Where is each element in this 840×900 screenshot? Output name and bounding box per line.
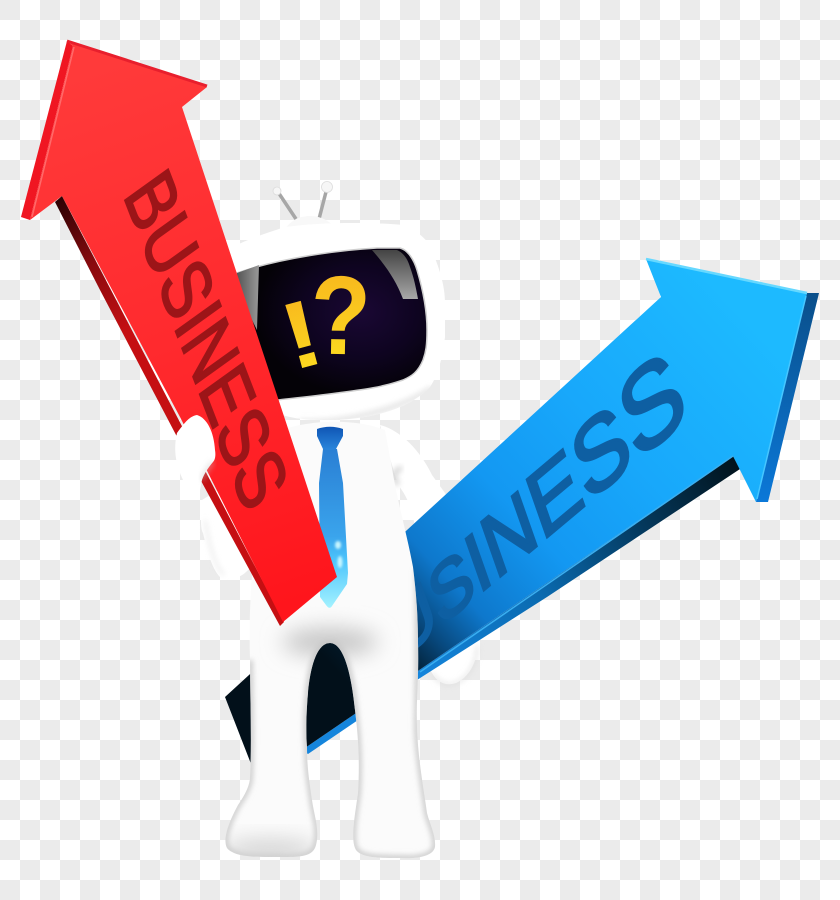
tie blade — [319, 449, 348, 608]
antenna cap — [283, 216, 338, 232]
blue arrow face — [225, 259, 807, 787]
blue arrow right edge — [756, 293, 819, 502]
red arrow left edge — [21, 41, 73, 220]
head shell — [200, 223, 445, 420]
exclamation mark: ! — [270, 278, 333, 390]
screen glare right — [372, 250, 418, 299]
antenna left — [273, 187, 296, 219]
red arrow — [21, 41, 337, 626]
tie knot — [317, 427, 343, 450]
screen — [237, 248, 427, 400]
necktie — [317, 427, 348, 608]
red arrow inner highlight — [32, 47, 74, 217]
red arrow label: BUSINESS — [109, 155, 303, 526]
blue arrow lower highlight — [420, 456, 733, 672]
red arrow face — [30, 41, 337, 622]
antenna right — [319, 182, 332, 219]
figure body and legs — [222, 422, 435, 860]
screen glare left — [237, 265, 259, 330]
blue arrow inner highlight — [757, 296, 806, 499]
left hand — [175, 415, 215, 490]
left arm — [201, 470, 280, 578]
right hand — [425, 630, 477, 684]
question mark: ? — [309, 254, 372, 379]
head — [232, 181, 445, 420]
blue arrow underside — [302, 456, 740, 754]
blue arrow — [225, 259, 819, 787]
tie highlights — [335, 541, 342, 568]
blue arrow label: BUSINESS — [333, 324, 699, 712]
red arrow top highlight — [67, 41, 207, 86]
blue arrow top highlight — [646, 259, 807, 293]
red arrow underside — [55, 196, 284, 626]
right arm — [380, 425, 450, 527]
